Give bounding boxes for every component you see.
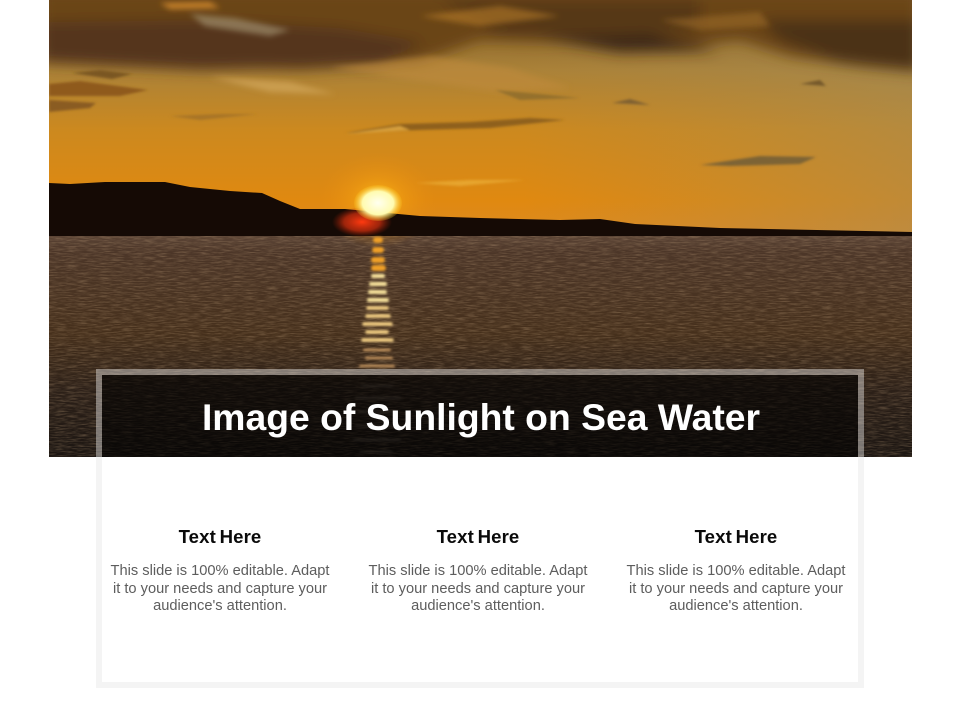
text block 1 — [110, 526, 330, 614]
shoreline hills — [49, 182, 912, 236]
title: Image of Sunlight on Sea Water — [202, 396, 760, 438]
sun — [354, 185, 402, 221]
sea — [49, 233, 912, 457]
body 1 — [110, 563, 330, 614]
body 3: it to your needs and capture your — [629, 581, 843, 597]
body 3 — [626, 563, 846, 614]
body 2: This slide is 100% editable. Adapt — [369, 563, 587, 579]
text block 3 — [626, 526, 846, 614]
heading 3: Text Here — [695, 526, 777, 547]
photo: sunset over the sea — [49, 0, 912, 457]
body 2 — [368, 563, 588, 614]
heading 1: Text Here — [179, 526, 261, 547]
body 3: This slide is 100% editable. Adapt — [627, 563, 845, 579]
text block 2 — [368, 526, 588, 614]
panel frame: lower light part — [96, 457, 864, 688]
sky — [49, 0, 912, 236]
body 2: audience's attention. — [411, 598, 545, 614]
sun glow — [318, 152, 438, 248]
panel frame: upper translucent part — [96, 369, 864, 457]
body 1: audience's attention. — [153, 598, 287, 614]
red sun flare — [332, 207, 392, 237]
body 1: This slide is 100% editable. Adapt — [111, 563, 329, 579]
body 2: it to your needs and capture your — [371, 581, 585, 597]
body 3: audience's attention. — [669, 598, 803, 614]
heading 2: Text Here — [437, 526, 519, 547]
sun reflection — [354, 240, 400, 452]
clouds — [40, 0, 920, 186]
title panel: dark translucent band — [102, 375, 858, 457]
body 1: it to your needs and capture your — [113, 581, 327, 597]
